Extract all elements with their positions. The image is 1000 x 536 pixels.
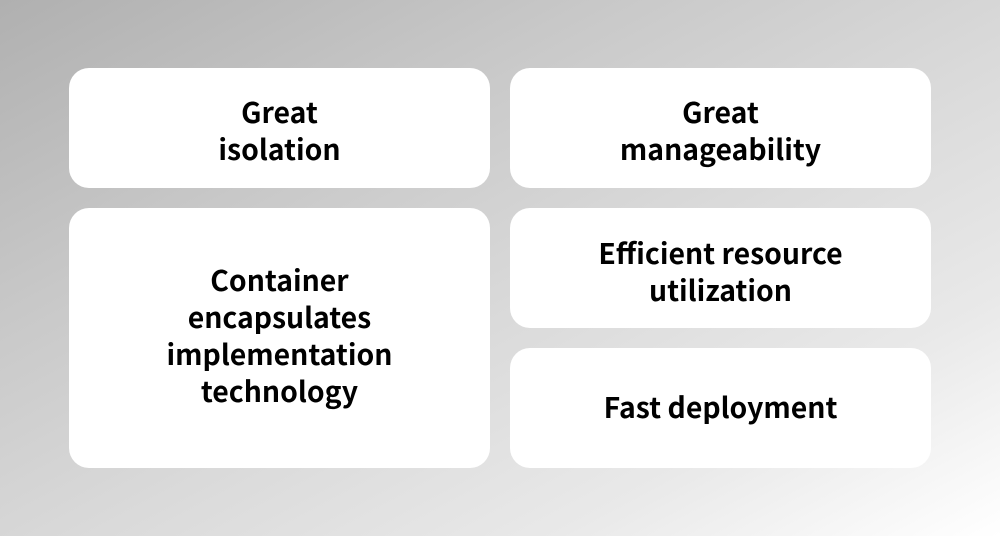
- panel: fast deployment: [510, 348, 931, 468]
- panel: great manageability: [510, 68, 931, 188]
- panel: container encapsulates implementation technology: encapsulates: [188, 296, 371, 337]
- panel: container encapsulates implementation technology: technology: [201, 370, 358, 411]
- panel: great manageability: Great: [682, 91, 759, 132]
- panel: container encapsulates implementation technology: [69, 208, 490, 468]
- panel: great manageability: manageability: [620, 128, 821, 169]
- panel: efficient resource utilization: utilization: [649, 269, 792, 310]
- panel: fast deployment: Fast deployment: [604, 386, 837, 426]
- panel: great isolation: isolation: [218, 128, 341, 169]
- panel: efficient resource utilization: [510, 208, 931, 328]
- panel: container encapsulates implementation technology: implementation: [167, 333, 392, 374]
- panel: container encapsulates implementation technology: Container: [210, 259, 349, 300]
- panel: great isolation: [69, 68, 490, 188]
- panel: great isolation: Great: [241, 91, 318, 132]
- panel: efficient resource utilization: Efficient resource: [598, 232, 843, 273]
